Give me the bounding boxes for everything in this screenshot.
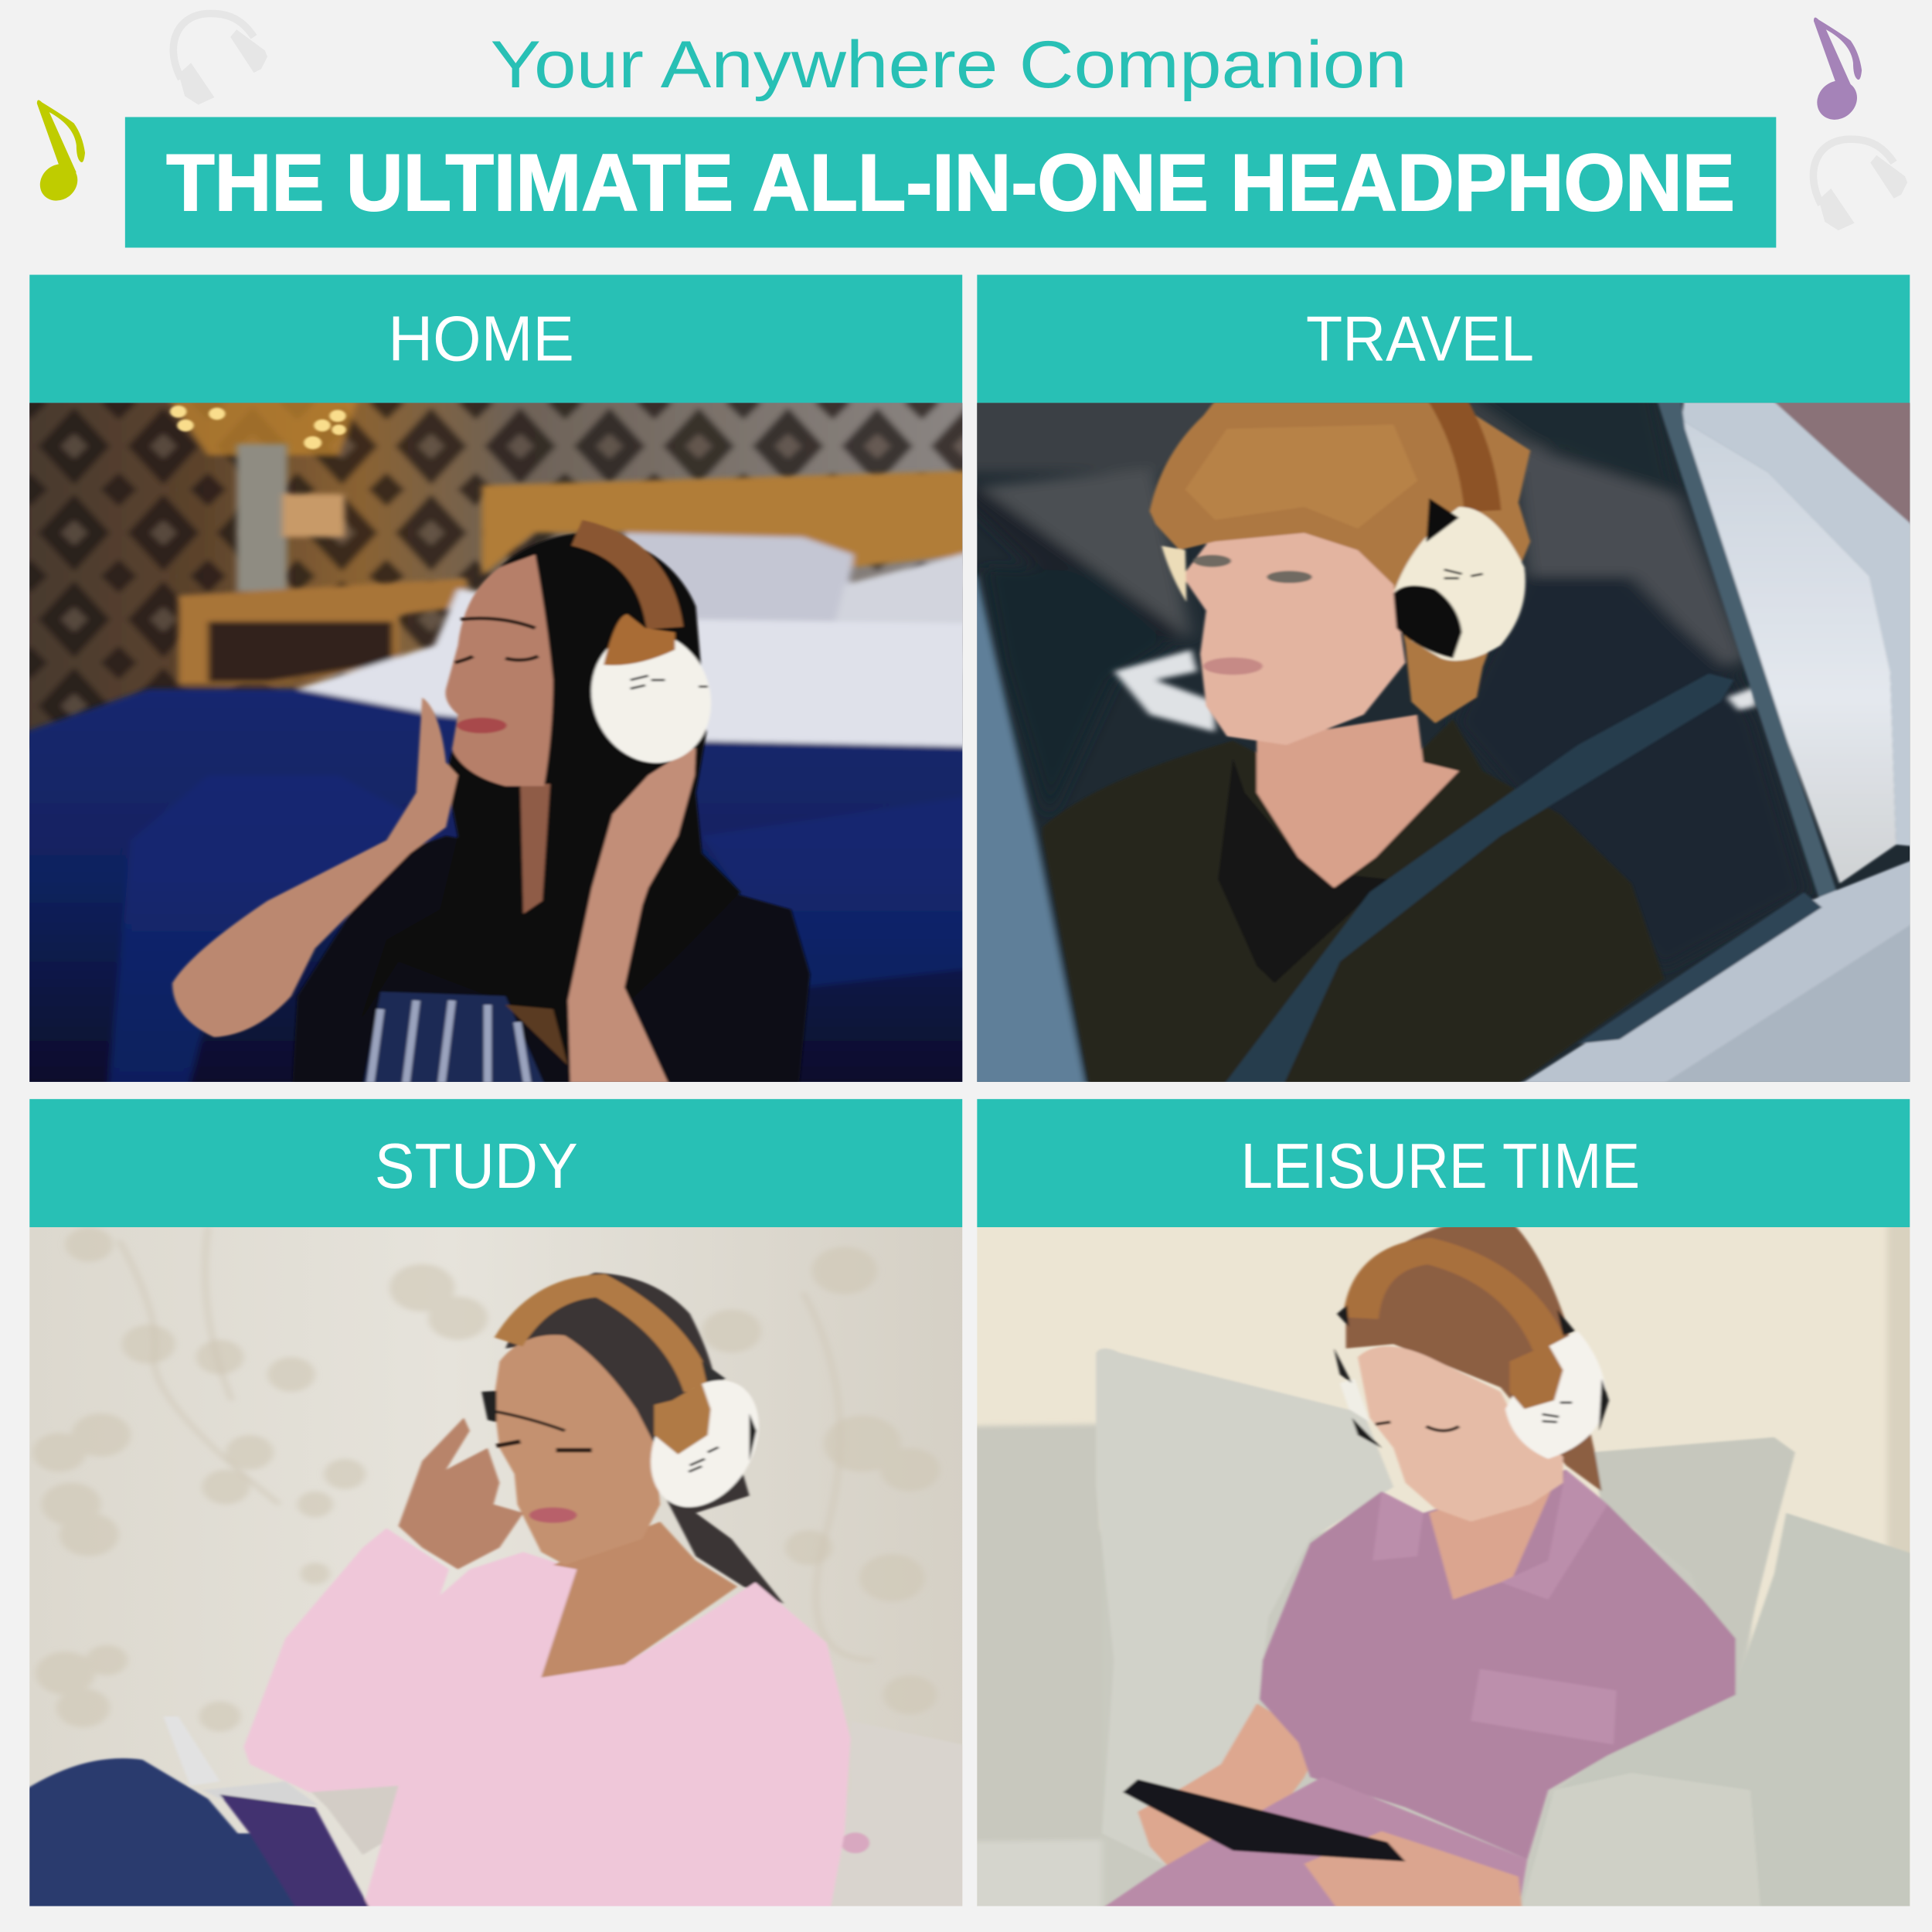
hair [1346,1223,1602,1492]
icon: purple music note [1809,18,1865,128]
book [163,1716,220,1786]
window glass [1682,420,1896,883]
icon: headphones top left [173,13,267,105]
armchair [1515,1513,1932,1929]
title banner [125,117,1776,247]
heading: travel: TRAVEL [1306,302,1534,374]
headband [1361,1251,1554,1357]
shirt print [359,992,553,1104]
heading: leisure time: LEISURE TIME [1241,1130,1640,1202]
headband [509,1286,699,1389]
shirt [1260,1470,1736,1859]
headband [577,532,665,628]
seat belt [1209,674,1733,1104]
tablet [1123,1779,1406,1862]
heading: travel [977,275,1910,403]
photo: girl reading [18,1223,993,1929]
pants [18,1758,327,1929]
arm right [568,745,696,1104]
heading: study [29,1099,962,1227]
heading: leisure time [977,1099,1910,1227]
pocket [1471,1668,1617,1745]
collar [1372,1470,1607,1600]
earmuff [1393,507,1526,661]
jacket [1043,719,1664,1104]
hand right [1304,1832,1525,1929]
earmuff [660,719,708,762]
icon: headphones top right [1813,139,1907,230]
face [1358,1346,1563,1522]
door [1488,849,1932,1104]
photo: girl in bedroom [29,403,963,1082]
neck [1257,715,1459,888]
earmuff [702,1362,726,1387]
subtitle: Your Anywhere Companion [491,28,1407,102]
earmuff [1505,1331,1607,1459]
photo: boy in car [954,386,1932,1104]
panel: leisure time [954,1099,1932,1929]
face [445,554,553,786]
pillow right [1590,1437,1795,1686]
face [494,1335,660,1565]
hand [399,1418,523,1570]
hair [359,532,740,1061]
neck [541,1522,737,1678]
arm [1138,1703,1322,1866]
panel: home [5,275,993,1104]
pants [1073,1777,1527,1929]
pillow left [1096,1349,1393,1866]
arm left [172,697,458,1037]
hair [505,1273,784,1604]
shirt [291,836,810,1104]
heading: home [29,275,962,403]
t-shirt [1218,758,1387,983]
heading: study: STUDY [375,1130,578,1202]
title: THE ULTIMATE ALL-IN-ONE HEADPHONE [166,138,1735,227]
icon: yellow music note [32,100,85,208]
panel: study [18,1099,993,1929]
neck [1429,1470,1560,1600]
hair [1150,386,1530,723]
heading: home: HOME [388,302,574,374]
chair [309,1764,410,1855]
face [1182,532,1406,745]
sweater [243,1528,851,1929]
neck [520,784,550,913]
panel: travel [954,275,1932,1104]
photo: girl with tablet [954,1210,1932,1929]
headband [1444,394,1483,511]
